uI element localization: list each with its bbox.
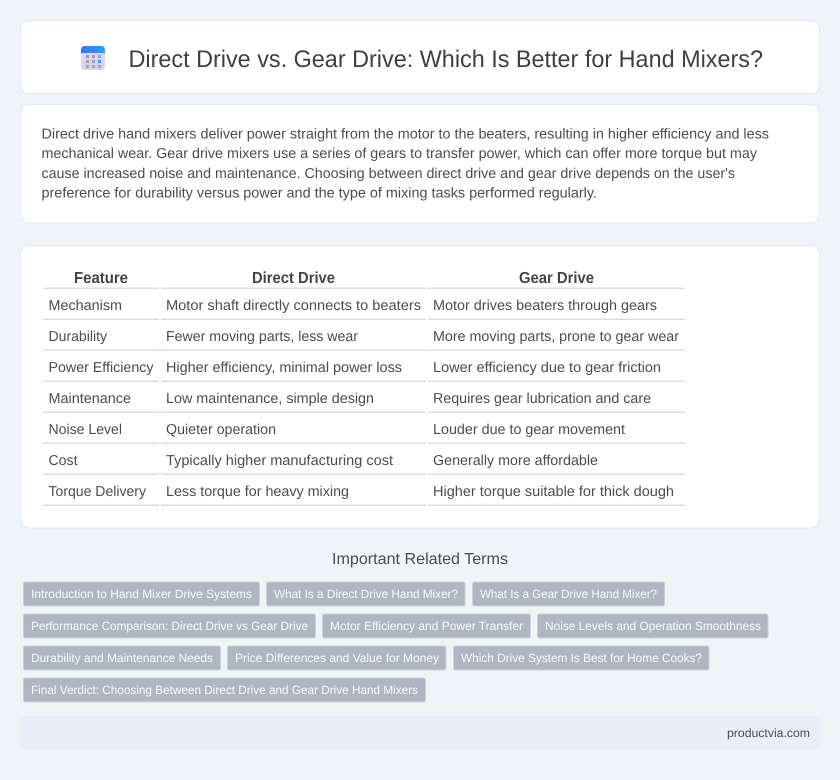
table row: mechanism xyxy=(43,298,685,320)
tag: gear drive xyxy=(472,582,664,606)
tag: best drive system xyxy=(454,646,709,670)
table row: maintenance: Requires gear lubrication and care xyxy=(433,391,651,407)
text block: introduction paragraph: Direct drive hand mixers deliver power straight from the motor to the beaters, resulting in higher efficiency and less xyxy=(42,126,769,142)
tag: price: Price Differences and Value for Money xyxy=(235,651,439,665)
table row: durability: Durability xyxy=(48,329,108,345)
table row: durability: More moving parts, prone to gear wear xyxy=(433,329,679,345)
table row: cost xyxy=(43,453,685,475)
table row: noise level: Noise Level xyxy=(48,422,122,438)
panel: header xyxy=(20,20,820,94)
table row: torque delivery: Less torque for heavy mixing xyxy=(166,484,349,500)
tag: motor efficiency xyxy=(322,614,530,638)
panel: introduction xyxy=(20,104,820,223)
tag: final verdict: Final Verdict: Choosing Between Direct Drive and Gear Drive Hand Mixers xyxy=(31,683,418,697)
table row: torque delivery: Torque Delivery xyxy=(48,484,147,500)
tag: direct drive xyxy=(266,582,465,606)
tag: performance comparison: Performance Comparison: Direct Drive vs Gear Drive xyxy=(31,619,308,633)
table row: maintenance xyxy=(43,391,685,413)
text block: introduction paragraph: preference for durability versus power and the type of mixing tasks performed regularly. xyxy=(42,186,597,202)
text block: introduction paragraph: cause increased noise and maintenance. Choosing between direct drive and gear drive depends on the user's xyxy=(42,166,735,182)
table row: power efficiency: Lower efficiency due to gear friction xyxy=(433,360,661,376)
tag: performance comparison xyxy=(24,614,316,638)
table row: noise level: Louder due to gear movement xyxy=(433,422,625,438)
related terms tags xyxy=(24,582,768,702)
tag: motor efficiency: Motor Efficiency and Power Transfer xyxy=(330,619,523,633)
heading: important related terms: Important Related Terms xyxy=(332,551,508,568)
table row: durability: Fewer moving parts, less wear xyxy=(166,329,358,345)
table row: mechanism: Motor drives beaters through gears xyxy=(433,298,657,314)
text block: introduction paragraph xyxy=(42,126,769,202)
table row: cost: Generally more affordable xyxy=(433,453,598,469)
footer xyxy=(20,716,820,750)
tag: final verdict xyxy=(24,678,426,702)
table row: maintenance: Low maintenance, simple design xyxy=(166,391,374,407)
table header row xyxy=(43,270,685,289)
table row: maintenance: Maintenance xyxy=(48,391,131,407)
text block: introduction paragraph: mechanical wear. Gear drive mixers use a series of gears to transfer power, which can offer more torque but may xyxy=(42,146,758,162)
table row: cost: Typically higher manufacturing cost xyxy=(166,453,393,469)
tag: price xyxy=(228,646,446,670)
tag: direct drive: What Is a Direct Drive Hand Mixer? xyxy=(274,587,458,601)
table row: torque delivery xyxy=(43,484,685,506)
tag: noise levels: Noise Levels and Operation Smoothness xyxy=(545,619,761,633)
table header row: Gear Drive xyxy=(519,270,594,287)
table row: power efficiency xyxy=(43,360,685,382)
table row: mechanism: Mechanism xyxy=(48,298,122,314)
table row: noise level: Quieter operation xyxy=(166,422,276,438)
table row: noise level xyxy=(43,422,685,444)
panel: comparison table xyxy=(20,246,820,528)
tag: introduction xyxy=(24,582,260,606)
tag: durability xyxy=(24,646,220,670)
table row: torque delivery: Higher torque suitable for thick dough xyxy=(433,484,674,500)
tag: durability: Durability and Maintenance Needs xyxy=(31,651,213,665)
tag: noise levels xyxy=(538,614,768,638)
tag: gear drive: What Is a Gear Drive Hand Mixer? xyxy=(480,587,657,601)
table row: cost: Cost xyxy=(48,453,78,469)
tag: best drive system: Which Drive System Is Best for Home Cooks? xyxy=(461,651,702,665)
table header row: Feature xyxy=(74,270,128,287)
footer source text: productvia.com xyxy=(727,726,810,740)
table header row: Direct Drive xyxy=(252,270,335,287)
title: Direct Drive vs. Gear Drive: Which Is Better for Hand Mixers? xyxy=(128,46,763,73)
table row: durability xyxy=(43,329,685,351)
icon: calendar xyxy=(81,46,105,70)
tag: introduction: Introduction to Hand Mixer Drive Systems xyxy=(31,587,252,601)
table row: mechanism: Motor shaft directly connects to beaters xyxy=(166,298,421,314)
table row: power efficiency: Power Efficiency xyxy=(48,360,154,376)
table row: power efficiency: Higher efficiency, minimal power loss xyxy=(166,360,402,376)
